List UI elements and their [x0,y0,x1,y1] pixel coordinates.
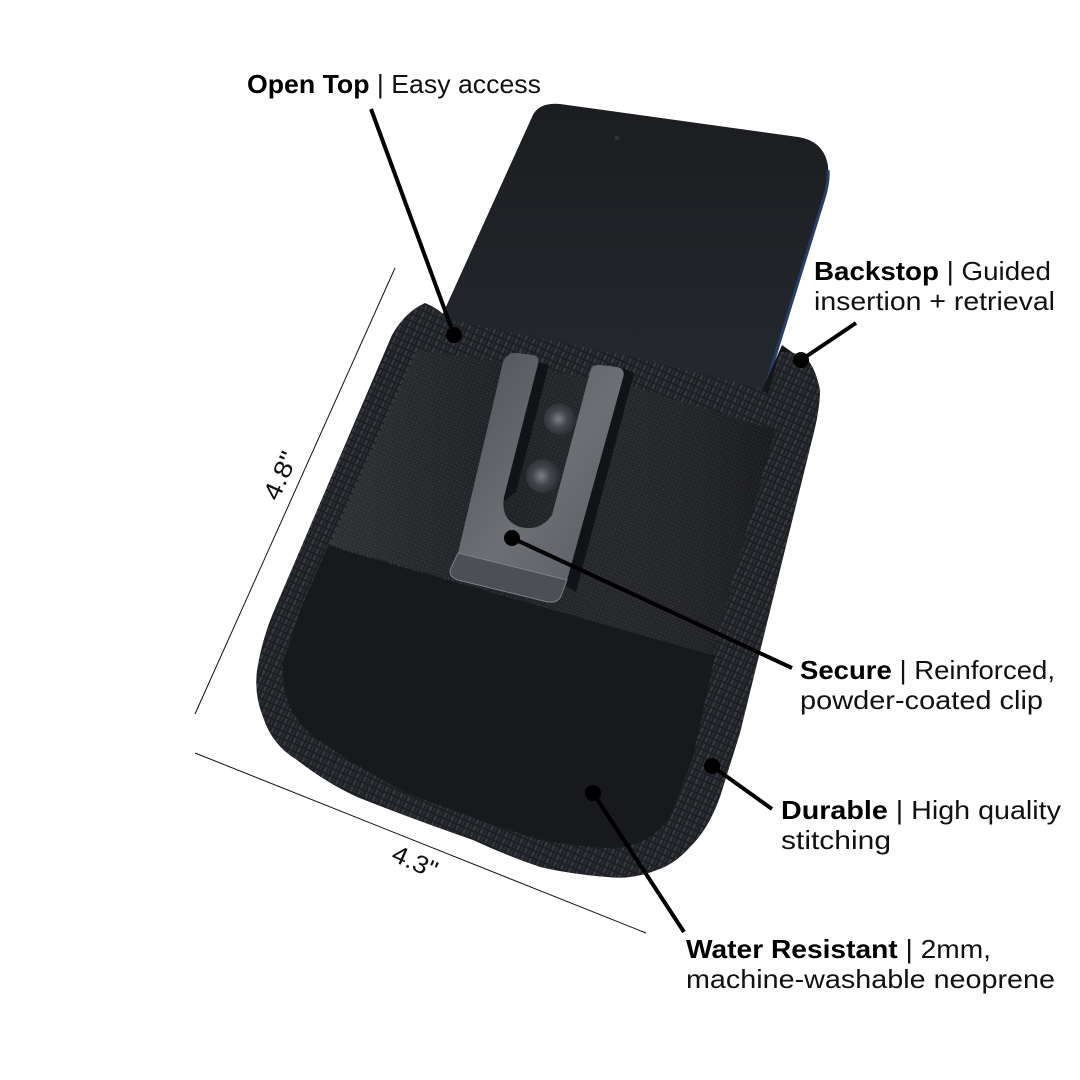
webbing band [330,350,775,655]
callout: backstop: Backstop | Guided [814,256,1051,286]
callout: backstop [793,256,1055,368]
callout: water resistant [585,785,1055,994]
neoprene panel [283,546,715,848]
dimension: height 4.8 in: 4.8" [258,447,304,504]
clip plate [458,353,624,580]
callout: secure: Secure | Reinforced, [800,655,1055,685]
callout: water resistant: machine-washable neoprene [686,964,1055,994]
callout: backstop: insertion + retrieval [814,286,1055,316]
callout: open top: Open Top | Easy access [247,69,541,99]
clip lip [450,553,567,602]
dimension: height 4.8 in [195,268,395,714]
binding [256,303,820,878]
callout: open top [247,69,541,343]
dimension: width 4.3 in: 4.3" [388,840,442,885]
rivets [544,403,576,435]
inner back gap [760,345,810,410]
callout: durable: Durable | High quality [781,795,1061,825]
callout: water resistant: Water Resistant | 2mm, [686,934,991,964]
callout: secure [504,530,1055,715]
clip shadow [566,368,634,592]
pouch body [256,303,820,878]
phone [440,104,828,400]
belt clip [450,353,634,602]
callout: durable: stitching [781,825,891,855]
callout: secure: powder-coated clip [800,685,1043,715]
dimension: width 4.3 in [195,753,646,933]
callout: durable [704,758,1061,855]
photo: phone in pouch [256,104,828,878]
slot shadow [503,362,549,502]
